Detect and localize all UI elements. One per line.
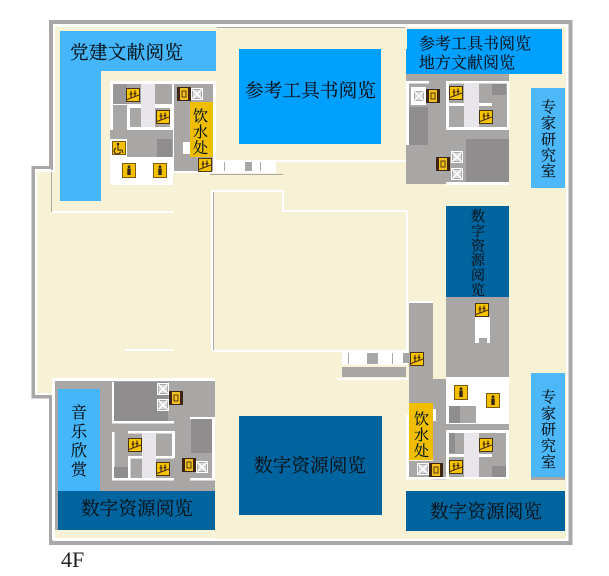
panel: reference and local literature: 参考工具书阅览 — [419, 35, 531, 53]
panel: expert room lower: 室 — [541, 454, 556, 471]
icon: box — [196, 461, 208, 473]
label: drinking water upper: 处 — [193, 140, 208, 157]
panel: expert room lower: 研 — [541, 422, 556, 438]
panel: music appreciation: 欣 — [71, 442, 87, 460]
panel: expert room upper: 室 — [541, 163, 556, 180]
panel: expert room lower: 究 — [541, 438, 556, 455]
panel: expert room upper — [531, 88, 565, 188]
panel: music appreciation: 音 — [71, 404, 87, 422]
panel: expert room lower: 专 — [541, 389, 556, 406]
icon: escalator — [480, 438, 492, 452]
label: drinking water upper — [190, 102, 213, 157]
floor area — [37, 27, 566, 539]
panel: music appreciation: 乐 — [71, 423, 88, 441]
panel: reference tools reading centre — [239, 49, 381, 144]
panel: party literature reading — [60, 31, 216, 201]
icon: male restroom — [122, 164, 136, 178]
panel: expert room upper: 研 — [541, 132, 556, 148]
building outline — [34, 22, 570, 543]
icon: escalator — [126, 88, 140, 102]
panel: digital resources lower right: 数字资源阅览 — [430, 502, 542, 523]
panel: digital resources centre right: 览 — [471, 282, 485, 299]
icon: male restroom — [454, 386, 468, 400]
panel: upper-left service core — [110, 81, 216, 185]
floor label: 4F — [61, 547, 84, 572]
icon: box — [157, 383, 169, 395]
icon: escalator — [476, 304, 488, 316]
icon: escalator — [410, 352, 424, 366]
icon: box — [157, 399, 169, 411]
icon: escalator — [156, 462, 170, 476]
icon: escalator — [156, 110, 170, 124]
central atrium outline — [212, 191, 407, 351]
panel: expert room lower — [531, 373, 565, 480]
label: drinking water lower: 处 — [414, 443, 429, 460]
icon: elevator — [436, 157, 450, 171]
icon: elevator — [169, 391, 183, 405]
panel: expert room upper: 专 — [541, 99, 556, 116]
panel: digital resources lower left: 数字资源阅览 — [81, 499, 193, 520]
panel: digital resources centre right: 数 — [471, 208, 485, 225]
panel: reference tools reading centre: 参考工具书阅览 — [245, 81, 376, 102]
panel: lower-left block — [52, 378, 215, 540]
icon: escalator — [480, 110, 492, 124]
corridor lines — [35, 27, 408, 395]
label: drinking water lower — [409, 403, 433, 460]
panel: right-side grey service block — [409, 297, 509, 480]
icon: female restroom — [154, 164, 166, 178]
panel: digital resources centre right: 资 — [471, 239, 486, 255]
panel: digital resources centre right — [446, 206, 509, 299]
label: drinking water lower: 饮 — [414, 411, 429, 428]
panel: digital resources bottom centre: 数字资源阅览 — [254, 456, 366, 477]
icon: escalator — [450, 460, 462, 474]
label: drinking water upper: 饮 — [193, 108, 208, 125]
panel: digital resources centre right: 源 — [471, 253, 486, 269]
icon: female restroom — [486, 394, 500, 408]
upper corridor strip — [210, 160, 283, 175]
panel: expert room upper: 家 — [541, 115, 556, 132]
icon: elevator — [426, 89, 440, 103]
icon: box — [413, 90, 425, 102]
panel: digital resources lower left — [58, 491, 215, 530]
icon: escalator — [198, 158, 212, 172]
panel: party literature reading: 党建文献阅览 — [70, 43, 183, 64]
label: drinking water upper: 水 — [193, 124, 208, 141]
icon: wheelchair — [112, 142, 126, 154]
panel: lower-right service core — [406, 377, 509, 480]
panel: digital resources centre right: 字 — [471, 224, 485, 240]
lower corridor strip — [342, 352, 410, 377]
panel: expert room upper: 究 — [541, 148, 556, 164]
icon: box — [417, 463, 429, 475]
icon: elevator — [177, 87, 191, 101]
panel: reference and local literature: 地方文献阅览 — [419, 53, 515, 72]
icon: box — [451, 168, 463, 180]
icon: box — [191, 88, 203, 100]
label: drinking water lower: 水 — [414, 427, 429, 444]
icon: escalator — [450, 86, 462, 100]
panel: music appreciation — [58, 389, 100, 491]
icon: elevator — [429, 463, 443, 477]
panel: upper-right service core — [406, 74, 510, 185]
icon: box — [411, 87, 426, 105]
panel: digital resources bottom centre — [239, 416, 382, 515]
panel: digital resources centre right: 阅 — [471, 268, 485, 284]
panel: digital resources lower right — [406, 491, 565, 531]
panel: expert room lower: 家 — [541, 406, 556, 422]
icon: escalator — [128, 438, 142, 452]
panel: reference and local literature — [406, 29, 562, 74]
icon: box — [451, 151, 463, 163]
panel: music appreciation: 赏 — [71, 461, 88, 479]
icon: elevator — [182, 458, 196, 472]
